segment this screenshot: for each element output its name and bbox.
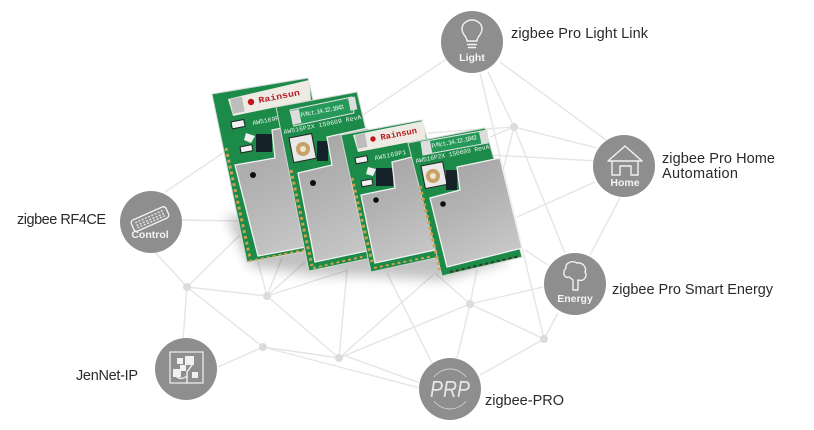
badge: Home <box>593 135 655 197</box>
module 2: antenna connector <box>276 92 395 271</box>
module 3: Rainsun front <box>341 120 458 272</box>
icon: light bulb <box>462 20 482 48</box>
module 1: Rainsun rear left: AW5169P1 <box>252 114 284 127</box>
label: zigbee Pro Home Automation: zigbee Pro Home <box>662 151 775 167</box>
PRP mark: PRP <box>430 376 471 402</box>
label: zigbee RF4CE: zigbee RF4CE <box>17 212 106 228</box>
network nodes <box>183 123 548 362</box>
icon: remote control <box>130 206 170 232</box>
badge: PRP <box>419 358 481 420</box>
module 3: Rainsun front: AW5169P1 <box>374 149 407 162</box>
badge: JenNet-IP <box>155 338 217 400</box>
label: zigbee Pro Smart Energy: zigbee Pro Smart Energy <box>612 282 774 298</box>
module shadow <box>226 215 512 280</box>
icon: tree <box>564 262 586 290</box>
badge: Energy <box>544 253 606 315</box>
label: zigbee-PRO: zigbee-PRO <box>485 393 564 409</box>
icon: house <box>608 146 642 175</box>
label: JenNet-IP: JenNet-IP <box>76 368 138 384</box>
Rainsun label: Rainsun <box>258 88 301 106</box>
Rainsun label: Rainsun <box>380 126 418 143</box>
label: zigbee Pro Home Automation: Automation <box>662 166 738 182</box>
label: zigbee Pro Light Link: zigbee Pro Light Link <box>511 26 649 42</box>
part number: P/N:t.14.12.1843 <box>431 134 478 150</box>
module 1: Rainsun rear left <box>212 78 345 262</box>
caption: Light: Light <box>459 52 485 64</box>
icon: network tree <box>170 352 203 383</box>
label: zigbee Pro Home Automation <box>662 151 775 182</box>
badge: Control <box>120 191 182 253</box>
module 4: antenna connector front: AW516P2X 150609 RevA <box>415 144 490 165</box>
caption: Energy: Energy <box>557 293 593 305</box>
caption: Home: Home <box>610 177 640 189</box>
background network lines <box>155 42 620 388</box>
badge: Light <box>441 11 503 73</box>
caption: Control: Control <box>131 229 169 241</box>
part number: P/N:t.14.12.1843 <box>300 104 345 119</box>
module 4: antenna connector front <box>408 128 522 276</box>
module 2: antenna connector: AW516P2X 150609 RevA <box>283 114 362 136</box>
icon: PRP ring <box>434 369 466 409</box>
